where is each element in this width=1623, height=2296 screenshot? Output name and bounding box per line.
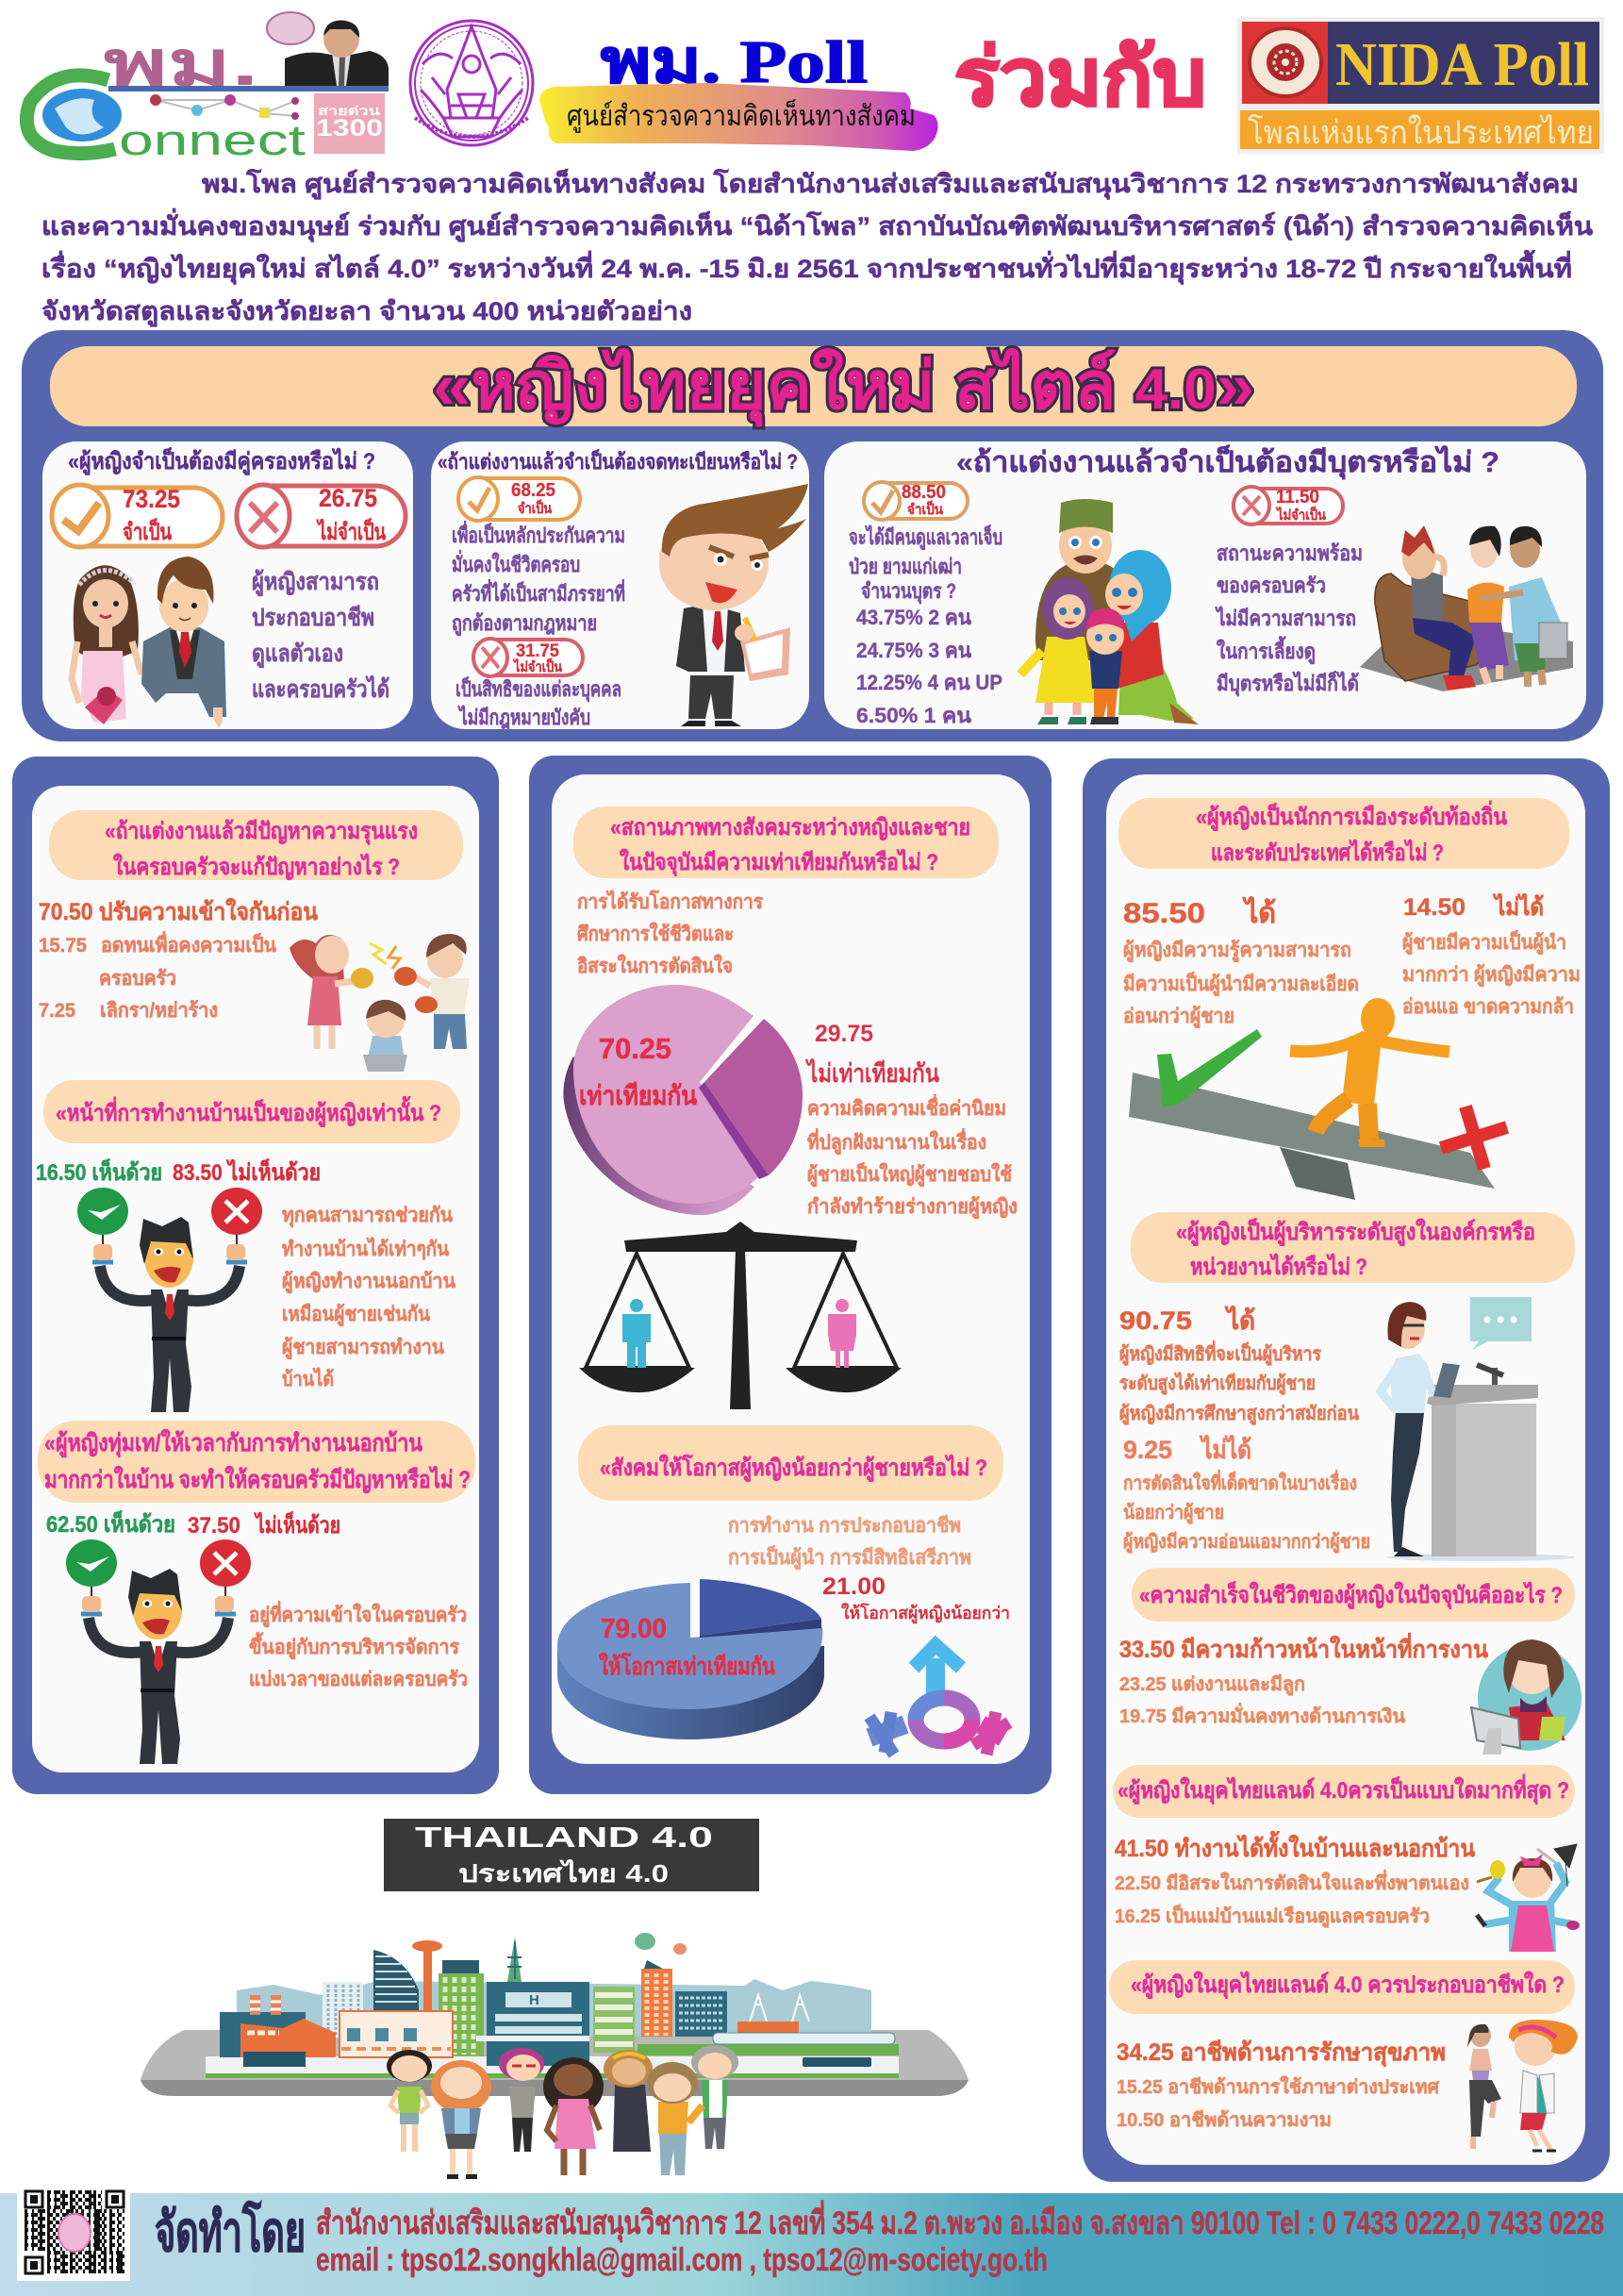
banner: Thailand 4.0: THAILAND 4.0 [415,1821,713,1854]
text: child-count statistics: ป่วย ยามแก่เฒ่า [849,555,962,578]
panel: top section [22,330,1603,741]
card: children question: «ถ้าแต่งงานแล้วจำเป็นต้องมีบุตรหรือไม่ ? [956,444,1499,480]
results: domestic violence: 7.25 [39,1000,75,1022]
question: success [1132,1568,1575,1622]
result: 9.25 cannot: ผู้หญิงมีความอ่อนแอมากกว่าผู้ชาย [1123,1531,1370,1555]
question: women politicians: «ผู้หญิงเป็นนักการเมืองระดับท้องถิ่น [1196,800,1508,831]
chart: opportunity pie: 79.00 [601,1614,667,1644]
text: education and freedom: การได้รับโอกาสทางการ [577,890,764,913]
results: success: 33.50 มีความก้าวหน้าในหน้าที่การงาน [1119,1633,1488,1663]
card: marriage registration: «ถ้าแต่งงานแล้วจำเป็นต้องจดทะเบียนหรือไม่ ? [438,448,798,474]
text: 29.75 not equal: ไม่เท่าเทียมกัน [805,1058,939,1088]
pill: 26.75 not necessary: ไม่จำเป็น [316,518,386,545]
chart: opportunity pie: ให้โอกาสเท่าเทียมกัน [599,1652,775,1680]
text: individual right [455,675,621,729]
illustration: family [1020,499,1199,724]
results: 62.50 agree, 37.50 disagree: ไม่เห็นด้วย [254,1511,340,1539]
illustration: man with signs [77,1188,262,1412]
text: child-count statistics: 24.75% 3 คน [856,639,971,662]
icon: gender symbol [869,1645,1009,1755]
question: working outside: มากกว่าในบ้าน จะทำให้ครอบครัวมีปัญหาหรือไม่ ? [44,1465,471,1493]
illustration: couple arguing with man on couch [1360,525,1573,691]
text: women can earn a living [252,569,389,703]
question: working outside: «ผู้หญิงทุ่มเท/ให้เวลากับการทำงานนอกบ้าน [44,1428,422,1458]
pill: 88.50 necessary: จำเป็น [907,500,944,518]
text: 29.75 not equal: ที่ปลูกฝังมานานในเรื่อง [807,1127,986,1156]
text: women can earn a living: ดูแลตัวเอง [252,641,343,669]
result: 14.50 cannot: ไม่ได้ [1492,892,1544,921]
panel: left column [12,757,499,1794]
illustration: bride and groom [72,557,226,728]
text: everyone can do housework [282,1205,456,1390]
results: careers: 15.25 อาชีพด้านการใช้ภาษาต่างประเทศ [1117,2075,1440,2098]
text: reasons for registering [452,520,625,637]
text: reasons for registering: ครัวที่ได้เป็นสามีภรรยาที่ [452,578,625,606]
results: 62.50 agree, 37.50 disagree [46,1510,340,1539]
result: 9.25 cannot: น้อยกว่าผู้ชาย [1123,1502,1224,1525]
illustration: multi-armed housewife [1477,1844,1580,1952]
result: 90.75 can: ผู้หญิงมีการศึกษาสูงกว่าสมัยก่อน [1119,1403,1359,1426]
result: 85.50 can: ผู้หญิงมีความรู้ความสามารถ [1123,939,1351,963]
heading: ร่วมกับ: ร่วมกับ [954,33,1206,122]
pill: 11.50 not necessary [1234,487,1343,524]
panel: right column [1083,758,1610,2182]
result: 85.50 can: ได้ [1242,896,1276,929]
illustration: family fight [290,934,470,1072]
result: 9.25 cannot [1123,1435,1370,1555]
pill: 26.75 not necessary: 26.75 [319,484,377,512]
results: domestic violence: ครอบครัว [99,968,176,990]
result: 85.50 can: 85.50 [1123,898,1205,929]
panel: center column [529,756,1052,1794]
chart: equality pie: 70.25 [599,1032,671,1065]
results: success: 23.25 แต่งงานและมีลูก [1119,1673,1305,1697]
logo: NIDA Poll: NIDA Poll [1335,30,1589,99]
result: 14.50 cannot: มากกว่า ผู้หญิงมีความ [1402,963,1581,988]
footer band: จัดทำโดย [155,2199,306,2263]
text: family readiness: ไม่มีความสามารถ [1215,606,1356,630]
results: ideal woman: 22.50 มีอิสระในการตัดสินใจและพึ่งพาตนเอง [1115,1869,1469,1894]
result: 9.25 cannot: ไม่ได้ [1199,1435,1251,1464]
title bar [50,346,1577,427]
results: domestic violence: เลิกรา/หย่าร้าง [100,999,218,1022]
card: partner question: «ผู้หญิงจำเป็นต้องมีคู่ครองหรือไม่ ? [68,447,375,475]
result: 14.50 cannot: 14.50 [1403,894,1466,921]
logo: Connect with ministry: onnect [119,116,306,164]
text: family management: ขึ้นอยู่กับการบริหารจัดการ [249,1632,460,1660]
results: 16.50 agree, 83.50 disagree: 83.50 ไม่เห็นด้วย [173,1158,321,1186]
people: seven women [387,2045,738,2179]
text: education and freedom: ศึกษาการใช้ชีวิตและ [577,922,734,945]
result: 90.75 can: ระดับสูงได้เท่าเทียมกับผู้ชาย [1119,1372,1316,1396]
illustration: smart city on a phone: H [529,1992,539,2008]
chart: equality pie: เท่าเทียมกัน [579,1081,697,1110]
text: 21.00 fewer opportunities: 21.00 [822,1573,886,1600]
intro paragraph: พม.โพล ศูนย์สำรวจความคิดเห็นทางสังคม โดยสำนักงานส่งเสริมและสนับสนุนวิชาการ 12 กระทรวงการพัฒนาสังคม [202,167,1579,200]
text: family readiness: ของครอบครัว [1217,574,1326,597]
result: 9.25 cannot: 9.25 [1123,1436,1172,1464]
result: 85.50 can: อ่อนกว่าผู้ชาย [1123,1005,1234,1029]
text: reasons for registering: ถูกต้องตามกฎหมาย [452,611,597,637]
result: 90.75 can: 90.75 [1119,1306,1192,1335]
text: individual right: ไม่มีกฎหมายบังคับ [457,705,590,729]
question: women politicians [1118,798,1569,869]
text: family readiness: มีบุตรหรือไม่มีก็ได้ [1217,670,1359,697]
results: 62.50 agree, 37.50 disagree: 37.50 [188,1513,240,1539]
question: working outside [38,1421,475,1503]
logo: ministry seal [410,21,533,145]
text: family readiness: สถานะความพร้อม [1217,541,1363,565]
pill: 68.25 necessary [458,477,580,521]
illustration: balancing figure on seesaw [1129,998,1507,1200]
logo: Connect with ministry: พม. [104,28,258,98]
result: 90.75 can: ได้ [1224,1306,1255,1335]
card: partner question [42,441,413,729]
result: 85.50 can [1123,896,1359,1029]
text: child-count statistics: จำนวนบุตร ? [861,579,956,605]
question: equality: ในปัจจุบันมีความเท่าเทียมกันหรือไม่ ? [620,848,938,877]
logo: พม. Poll [539,28,938,151]
question: equality [573,807,999,878]
text: education and freedom [577,890,764,977]
QR code [17,2188,130,2281]
text: everyone can do housework: ทุกคนสามารถช่วยกัน [282,1205,454,1228]
text: everyone can do housework: ผู้หญิงทำงานนอกบ้าน [282,1270,456,1294]
title bar: «หญิงไทยยุคใหม่ สไตล์ 4.0» [433,347,1254,427]
text: work and leadership: การเป็นผู้นำ การมีสิทธิเสรีภาพ [728,1544,971,1571]
intro paragraph: เรื่อง “หญิงไทยยุคใหม่ สไตล์ 4.0” ระหว่างวันที่ 24 พ.ค. -15 มิ.ย 2561 จากประชาชนทั่วไปที่มีอายุระหว่าง 18-72 ปี กระจายในพื้นที่ [41,249,1572,285]
text: reasons for registering: มั่นคงในชีวิตครอบ [452,549,580,576]
results: careers: 34.25 อาชีพด้านการรักษาสุขภาพ [1117,2039,1446,2068]
pill: 31.75 not necessary: 31.75 [516,641,559,661]
results: 16.50 agree, 83.50 disagree: 16.50 เห็นด้วย [36,1158,162,1186]
illustration: man with signs 2 [66,1539,251,1764]
results: 62.50 agree, 37.50 disagree: 62.50 เห็นด้วย [46,1510,175,1538]
banner: Thailand 4.0 [384,1819,759,1891]
question: housework [43,1080,460,1143]
results: careers: 10.50 อาชีพด้านความงาม [1117,2109,1332,2131]
pill: 31.75 not necessary: ไม่จำเป็น [512,657,563,675]
text: everyone can do housework: ทำงานบ้านได้เท่าๆกัน [282,1237,450,1260]
text: everyone can do housework: บ้านได้ [282,1367,334,1390]
text: women can earn a living: ประกอบอาชีพ [252,605,374,631]
results: careers [1117,2039,1446,2131]
illustration: woman at podium [1381,1297,1575,1561]
illustration: woman at computer [1471,1639,1582,1755]
pill: 11.50 not necessary: ไม่จำเป็น [1275,506,1327,524]
logo: NIDA Poll [1237,17,1604,154]
results: success [1119,1633,1488,1727]
text: family management: อยู่ที่ความเข้าใจในครอบครัว [249,1600,467,1628]
question: ideal woman in Thailand 4.0: «ผู้หญิงในยุคไทยแลนด์ 4.0ควรเป็นแบบใดมากที่สุด ? [1118,1773,1569,1805]
result: 14.50 cannot: ผู้ชายมีความเป็นผู้นำ [1402,929,1566,956]
illustration: man with clipboard [659,484,808,726]
results: ideal woman: 16.25 เป็นแม่บ้านแม่เรือนดูแลครอบครัว [1115,1904,1430,1929]
pill: 68.25 necessary: 68.25 [511,480,555,501]
chart: equality pie [563,985,803,1215]
pill: 73.25 necessary: 73.25 [123,485,180,513]
pill: 68.25 necessary: จำเป็น [518,499,553,517]
text: child-count statistics: 6.50% 1 คน [856,704,971,727]
text: education and freedom: อิสระในการตัดสินใจ [577,954,733,977]
intro paragraph: จังหวัดสตูลและจังหวัดยะลา จำนวน 400 หน่วยตัวอย่าง [41,297,692,327]
pill: 31.75 not necessary [473,639,583,676]
question: domestic violence: ในครอบครัวจะแก้ปัญหาอย่างไร ? [113,853,400,880]
result: 90.75 can [1119,1306,1359,1426]
intro paragraph [41,167,1594,327]
text: child-count statistics: 12.25% 4 คน UP [856,671,1002,694]
question: success: «ความสำเร็จในชีวิตของผู้หญิงในปัจจุบันคืออะไร ? [1139,1581,1563,1610]
text: 29.75 not equal: 29.75 [815,1021,873,1047]
logo: พม. Poll: ศูนย์สำรวจความคิดเห็นทางสังคม [567,98,916,133]
text: women can earn a living: ผู้หญิงสามารถ [252,569,379,597]
text: 21.00 fewer opportunities [822,1573,1010,1624]
text: 21.00 fewer opportunities: ให้โอกาสผู้หญิงน้อยกว่า [841,1603,1010,1624]
icon: balance scale with male and female [579,1222,902,1409]
question: ideal woman in Thailand 4.0 [1113,1765,1575,1818]
results: domestic violence: 15.75 [39,935,87,957]
pill: 73.25 necessary [52,485,223,547]
text: 29.75 not equal: กำลังทำร้ายร่างกายผู้หญิง [807,1195,1018,1220]
text: women can earn a living: และครอบครัวได้ [252,674,389,703]
result: 9.25 cannot: การตัดสินใจที่เด็ดขาดในบางเรื่อง [1123,1469,1357,1494]
logo: Connect with ministry [26,12,389,164]
footer band [0,2188,1623,2296]
results: domestic violence [39,897,318,1022]
card: marriage registration [431,441,809,729]
text: child-count statistics: 43.75% 2 คน [856,606,971,629]
results: ideal woman [1115,1830,1475,1929]
text: 29.75 not equal: ผู้ชายเป็นใหญ่ผู้ชายชอบใช้ [807,1161,1012,1188]
question: domestic violence [49,810,463,880]
logo: NIDA Poll: โพลแห่งแรกในประเทศไทย [1248,114,1594,151]
card: children question [824,441,1586,729]
question: women politicians: และระดับประเทศได้หรือไม่ ? [1211,839,1444,866]
text: family management: แบ่งเวลาของแต่ละครอบครัว [249,1669,468,1690]
results: success: 19.75 มีความมั่นคงทางด้านการเงิน [1119,1702,1405,1727]
pill: 88.50 necessary [864,482,968,520]
results: ideal woman: 41.50 ทำงานได้ทั้งในบ้านและนอกบ้าน [1115,1830,1475,1862]
banner: Thailand 4.0: ประเทศไทย 4.0 [458,1858,669,1888]
question: women executives [1131,1212,1575,1283]
text: family management [249,1600,468,1690]
question: women executives: «ผู้หญิงเป็นผู้บริหารระดับสูงในองค์กรหรือ [1176,1218,1535,1246]
pill: 73.25 necessary: จำเป็น [123,518,172,545]
result: 90.75 can: ผู้หญิงมีสิทธิที่จะเป็นผู้บริหาร [1119,1339,1321,1367]
text: family readiness [1215,541,1363,697]
pill: 11.50 not necessary: 11.50 [1276,487,1319,507]
text: family readiness: ในการเลี้ยงดู [1217,636,1316,665]
result: 85.50 can: มีความเป็นผู้นำมีความละเอียด [1123,971,1359,997]
text: child-count statistics: จะได้มีคนดูแลเวลาเจ็บ [849,524,1002,551]
pill: 26.75 not necessary [237,484,406,547]
question: women executives: หน่วยงานได้หรือไม่ ? [1190,1253,1367,1280]
question: domestic violence: «ถ้าแต่งงานแล้วมีปัญหาความรุนแรง [105,819,418,846]
question: careers: «ผู้หญิงในยุคไทยแลนด์ 4.0 ควรประกอบอาชีพใด ? [1131,1971,1565,2000]
text: work and leadership [728,1514,971,1571]
question: careers [1109,1960,1575,2014]
pill: 88.50 necessary: 88.50 [902,482,946,503]
result: 14.50 cannot: อ่อนแอ ขาดความกล้า [1402,995,1574,1018]
text: individual right: เป็นสิทธิของแต่ละบุคคล [455,675,621,703]
text: 29.75 not equal: ความคิดความเชื่อค่านิยม [807,1093,1006,1120]
text: everyone can do housework: เหมือนผู้ชายเช่นกัน [282,1303,431,1327]
question: fewer opportunities: «สังคมให้โอกาสผู้หญิงน้อยกว่าผู้ชายหรือไม่ ? [600,1454,987,1482]
text: reasons for registering: เพื่อเป็นหลักประกันความ [452,520,625,547]
question: fewer opportunities [578,1425,1003,1501]
results: domestic violence: 70.50 ปรับความเข้าใจกันก่อน [39,897,318,925]
illustration: smart city on a phone [141,1933,969,2179]
text: work and leadership: การทำงาน การประกอบอาชีพ [728,1514,961,1537]
text: 29.75 not equal [805,1021,1018,1220]
text: everyone can do housework: ผู้ชายสามารถทำงาน [282,1336,445,1360]
illustration: fitness woman and doctor [1467,2020,1578,2151]
results: 16.50 agree, 83.50 disagree [36,1158,321,1186]
intro paragraph: และความมั่นคงของมนุษย์ ร่วมกับ ศูนย์สำรวจความคิดเห็น “นิด้าโพล” สถาบันบัณฑิตพัฒนบริหารศาสตร์ (นิด้า) สำรวจความคิดเห็น [41,208,1594,242]
question: equality: «สถานภาพทางสังคมระหว่างหญิงและชาย [610,815,970,840]
results: domestic violence: อดทนเพื่อคงความเป็น [101,930,277,957]
logo: Connect with ministry: สายด่วน [318,104,380,118]
logo: พม. Poll: พม. Poll [601,28,868,95]
logo: Connect with ministry: 1300 [316,115,383,141]
question: housework: «หน้าที่การทำงานบ้านเป็นของผู้หญิงเท่านั้น ? [56,1095,441,1127]
chart: opportunity pie [557,1579,824,1739]
text: child-count statistics [849,524,1002,727]
footer band: email : tpso12.songkhla@gmail.com , tpso12@m-society.go.th [316,2242,1048,2278]
result: 14.50 cannot [1402,892,1581,1018]
